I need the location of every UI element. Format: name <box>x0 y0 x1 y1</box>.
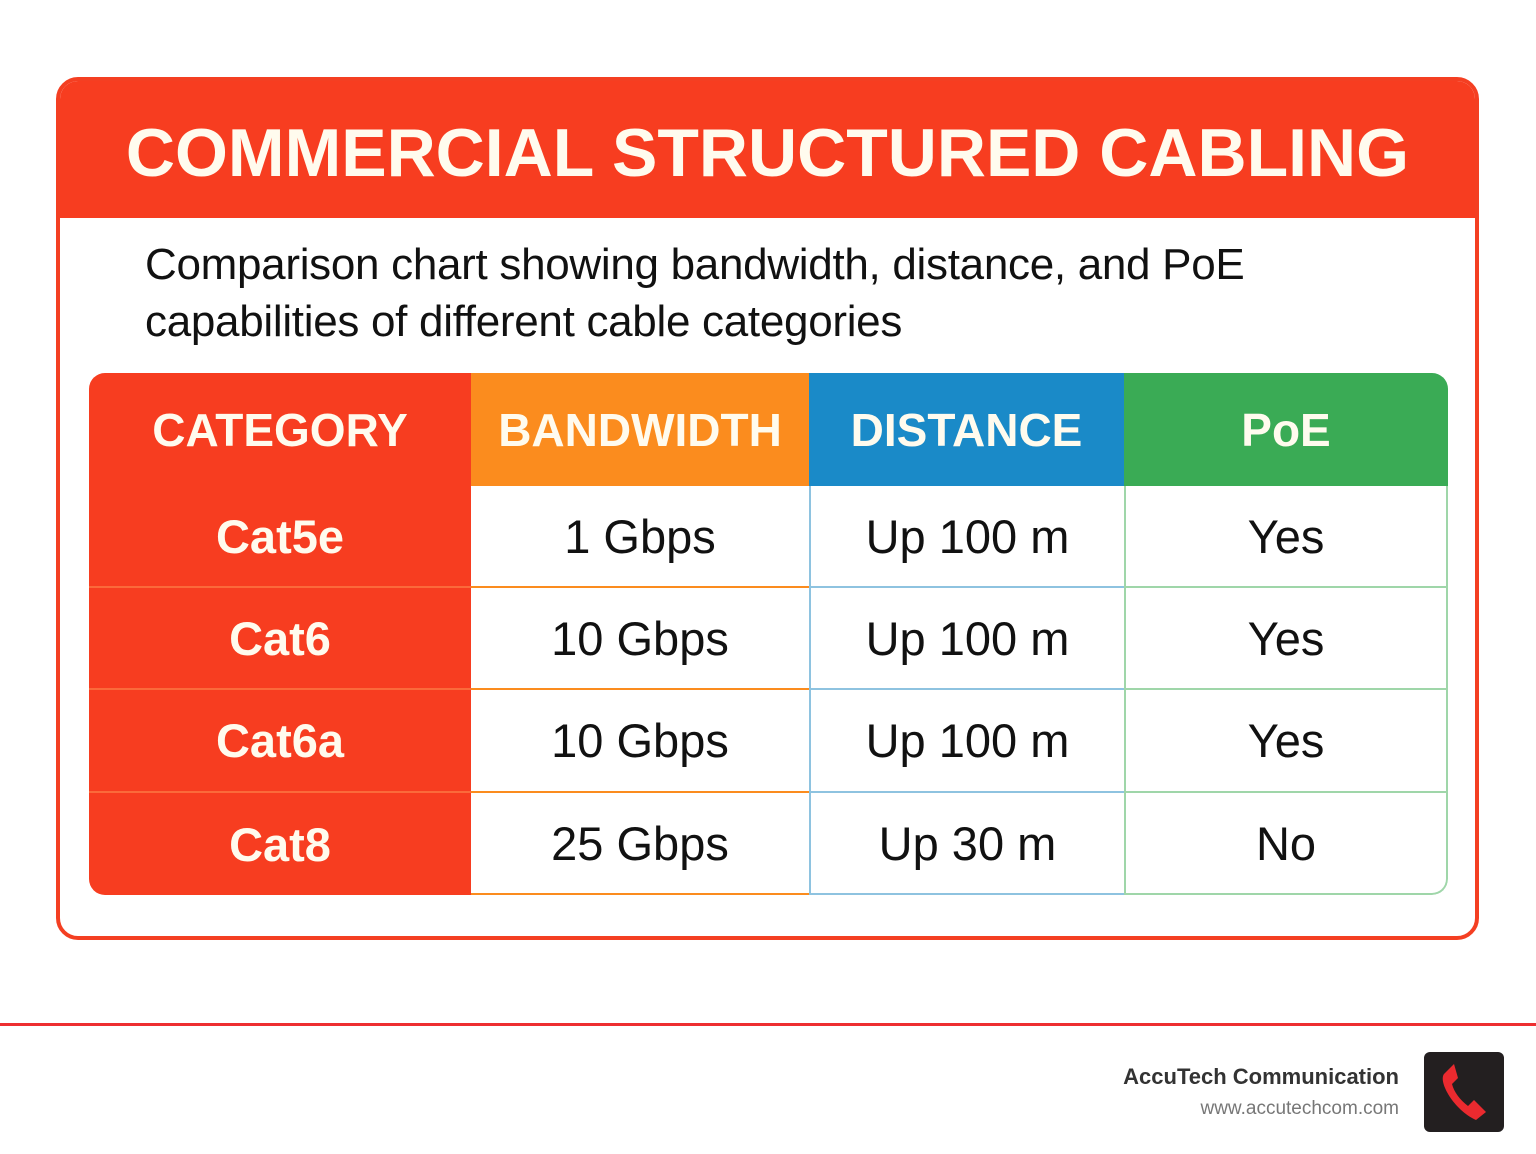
header: category: CATEGORY <box>152 404 408 456</box>
row: Cat8 <box>89 793 471 895</box>
header: distance <box>809 373 1124 486</box>
footer: url: www.accutechcom.com <box>1200 1098 1399 1119</box>
table: 25 Gbps <box>551 816 729 870</box>
header: bandwidth <box>471 373 809 486</box>
header: bandwidth: BANDWIDTH <box>498 404 782 456</box>
row: Cat6a <box>89 690 471 793</box>
table <box>89 373 1448 895</box>
table: 1 Gbps <box>564 510 716 562</box>
title: COMMERCIAL STRUCTURED CABLING <box>126 115 1409 191</box>
table: Up 30 m <box>879 816 1056 870</box>
table: No <box>1256 816 1316 870</box>
table: Up 100 m <box>866 510 1069 562</box>
table: Up 100 m <box>866 612 1069 664</box>
header: distance: DISTANCE <box>851 404 1082 456</box>
table: 10 Gbps <box>551 714 729 767</box>
table: Up 100 m <box>866 714 1069 767</box>
row: Cat6a: Cat6a <box>216 714 344 767</box>
table: Yes <box>1248 612 1324 664</box>
subtitle <box>145 240 1244 346</box>
row: Cat6: Cat6 <box>229 612 331 664</box>
table: Yes <box>1248 714 1324 767</box>
footer: company name: AccuTech Communication <box>1123 1064 1399 1089</box>
table: 10 Gbps <box>551 612 729 664</box>
row: Cat5e <box>89 486 471 588</box>
row: Cat6 <box>89 588 471 690</box>
header band <box>60 81 1475 218</box>
table: Yes <box>1248 510 1324 562</box>
header: PoE <box>1124 373 1448 486</box>
icon: phone logo <box>1424 1052 1504 1132</box>
header: category <box>89 373 471 486</box>
subtitle: Comparison chart showing bandwidth, distance, and PoE <box>145 240 1244 289</box>
footer divider <box>0 1023 1536 1026</box>
card <box>56 77 1479 940</box>
header: PoE: PoE <box>1241 404 1331 456</box>
row: Cat8: Cat8 <box>229 818 331 870</box>
subtitle: capabilities of different cable categories <box>145 297 902 346</box>
row: Cat5e: Cat5e <box>216 510 344 562</box>
